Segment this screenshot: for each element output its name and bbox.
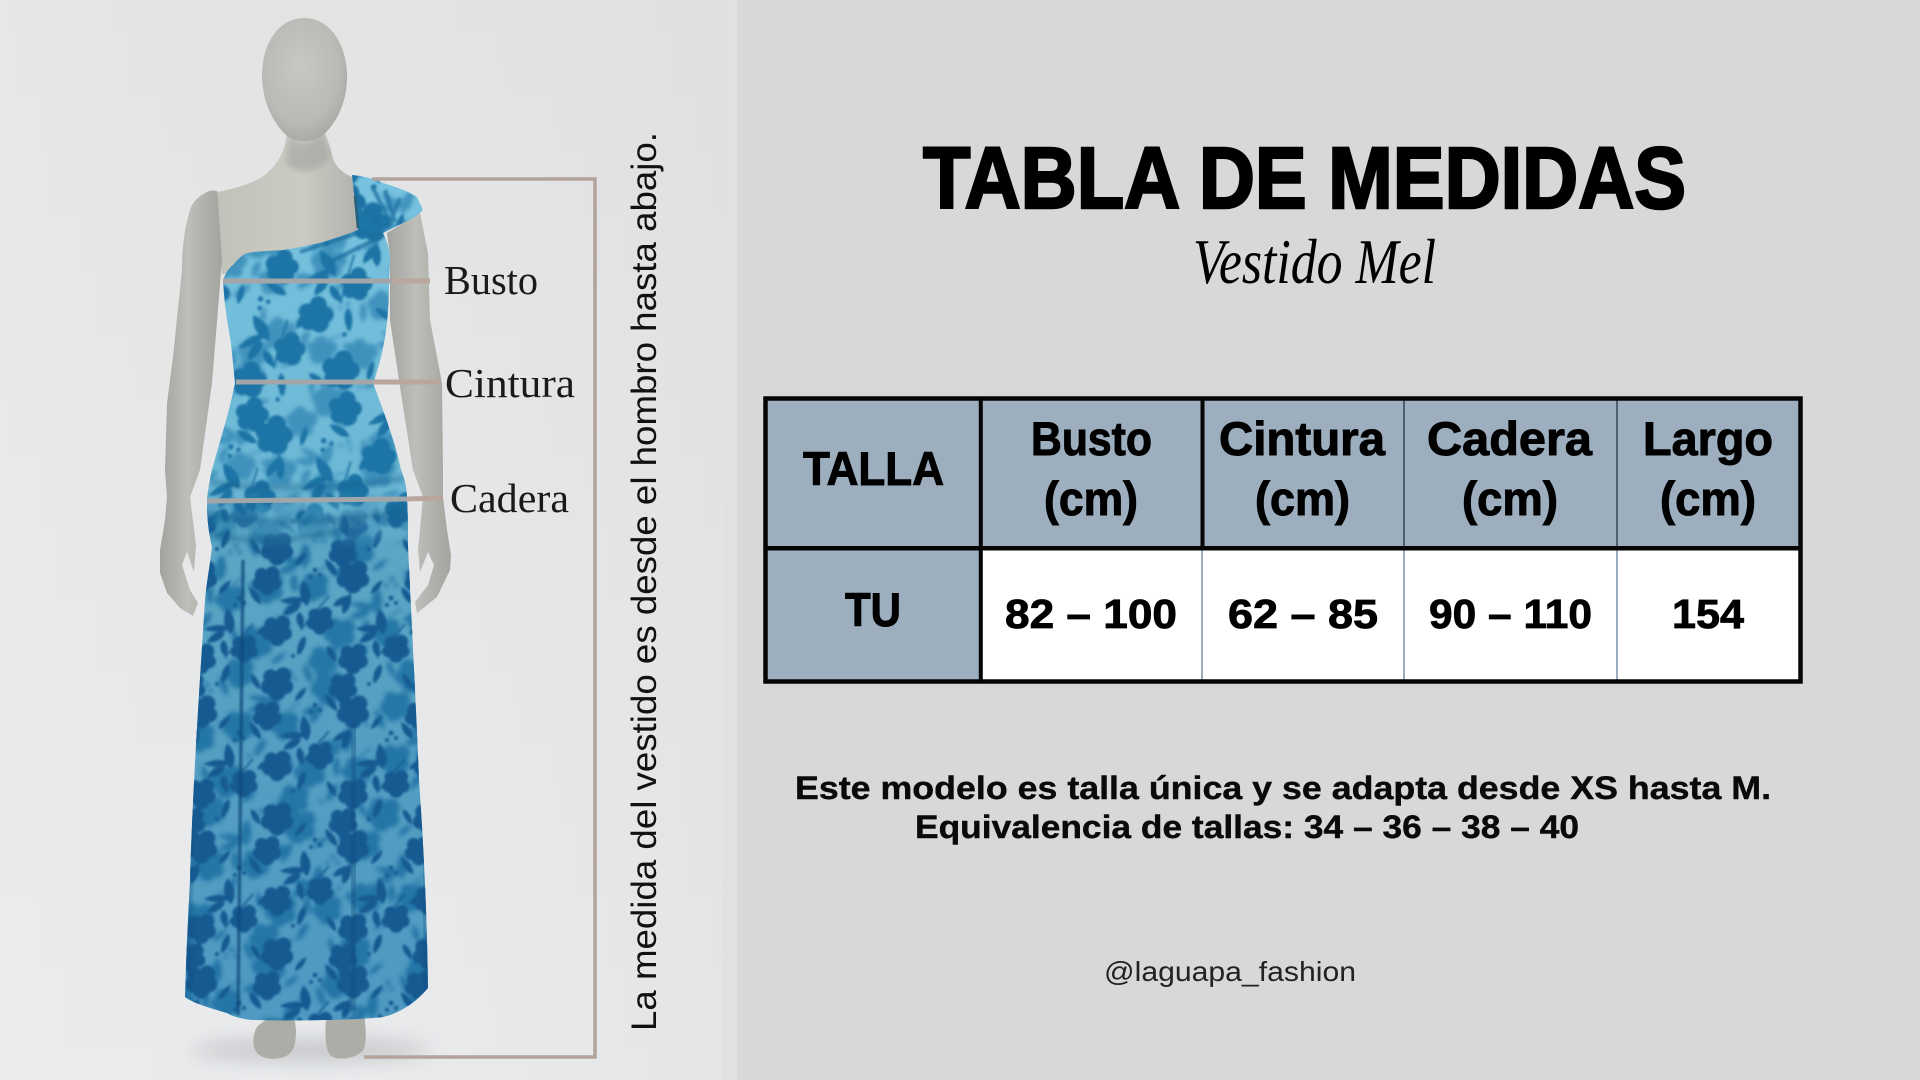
panel: mannequin photo — [0, 0, 737, 1080]
header: cintura: Cintura — [1219, 412, 1386, 465]
measure line: cintura — [236, 380, 440, 384]
header: busto — [1031, 412, 1152, 525]
left arm and hand — [160, 191, 222, 616]
measure line: busto — [223, 278, 430, 284]
header: largo: Largo — [1643, 412, 1773, 465]
label: cadera: Cadera — [450, 475, 569, 521]
header: cadera: Cadera — [1427, 412, 1593, 465]
header: busto: (cm) — [1044, 472, 1138, 525]
dress — [185, 175, 428, 1020]
value: busto: 82 – 100 — [1005, 591, 1177, 637]
mannequin torso and neck — [217, 125, 360, 275]
size table — [766, 398, 1800, 682]
note text: Equivalencia de tallas: 34 – 36 – 38 – 40 — [915, 809, 1579, 845]
table body fill — [981, 549, 1800, 681]
thin column rules — [1202, 400, 1617, 680]
value: cintura: 62 – 85 — [1228, 591, 1378, 637]
header: cintura: (cm) — [1255, 472, 1350, 525]
header: busto: Busto — [1031, 412, 1152, 465]
mannequin figure — [160, 18, 451, 1059]
value: cadera: 90 – 110 — [1429, 591, 1592, 637]
dress skirt print — [185, 468, 428, 1020]
title: TABLA DE MEDIDAS — [923, 130, 1686, 227]
mannequin head — [262, 18, 347, 141]
strap inner facing — [355, 196, 358, 228]
note text — [795, 770, 1771, 845]
heavy table rules — [766, 398, 1800, 682]
hip gathers — [208, 478, 405, 540]
neck shadow — [286, 134, 330, 171]
right arm and hand — [387, 213, 451, 613]
label: cintura: Cintura — [445, 360, 575, 406]
header: talla: TALLA — [803, 442, 944, 495]
shoulder gathers — [300, 186, 400, 262]
floor shadow — [190, 1041, 430, 1059]
row label: TU: TU — [845, 583, 901, 636]
header: largo: (cm) — [1660, 472, 1756, 525]
header: largo — [1643, 412, 1773, 525]
measure line: cadera — [207, 498, 443, 501]
subtitle: Vestido Mel — [1193, 226, 1436, 297]
header: cadera — [1427, 412, 1593, 525]
photo backdrop — [0, 0, 737, 1080]
dress bodice print — [207, 175, 423, 544]
note text: Este modelo es talla única y se adapta desde XS hasta M. — [795, 770, 1771, 806]
label: busto: Busto — [444, 257, 538, 303]
measure box: dress length — [364, 179, 595, 1057]
header: cadera: (cm) — [1462, 472, 1558, 525]
skirt fold shadows — [188, 560, 426, 1015]
header: cintura — [1219, 412, 1386, 525]
value: largo: 154 — [1672, 591, 1744, 637]
vertical note: La medida del vestido es desde el hombro hasta abajo. — [625, 132, 664, 1031]
social handle: @laguapa_fashion — [1104, 956, 1356, 987]
feet — [253, 1003, 366, 1059]
table header fill — [766, 399, 1800, 681]
